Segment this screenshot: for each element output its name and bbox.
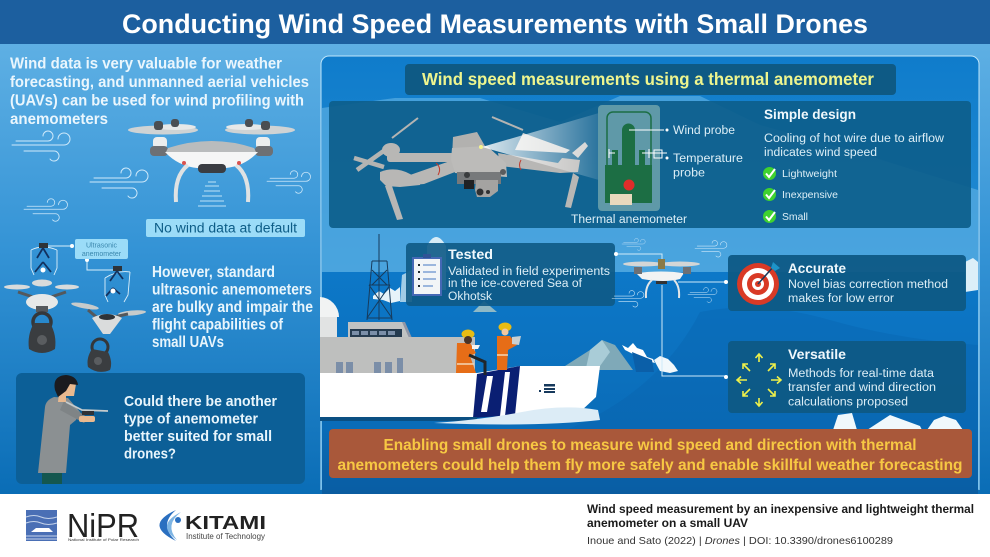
no wind data label: No wind data at default: [154, 220, 297, 236]
intro text: (UAVs) can be used for wind profiling with: [10, 92, 304, 110]
simple design text: Simple design: [764, 106, 856, 122]
conclusion banner: [329, 429, 972, 478]
panel: versatile: Methods for real-time data: [788, 368, 935, 380]
panel: question: Could there be another: [124, 393, 277, 410]
logo: Kitami: Institute of Technology: [186, 532, 265, 541]
anemometer labels: Wind probe: [673, 125, 735, 137]
panel: question: type of anemometer: [124, 410, 258, 428]
logo: NiPR: [26, 507, 139, 544]
simple design text: Small: [782, 212, 808, 223]
anemometer close-up: [598, 105, 668, 211]
logo: Kitami: KITAMI: [185, 512, 266, 533]
panel: accurate: Accurate: [788, 260, 846, 276]
simple design text: indicates wind speed: [764, 147, 877, 159]
panel: accurate: Novel bias correction method: [788, 279, 948, 291]
however text: flight capabilities of: [152, 316, 284, 334]
intro text: anemometers: [10, 111, 108, 128]
intro text: [10, 56, 309, 128]
citation: Wind speed measurement by an inexpensive and lightweight thermal: [587, 504, 974, 516]
tilted drone with ultrasonic anemometer and weight: [71, 266, 146, 372]
ultrasonic anemometer label: [44, 239, 128, 270]
panel: tested: Validated in field experiments: [448, 266, 610, 278]
icon: clipboard: [412, 254, 442, 296]
heading: thermal anemometer: [405, 64, 896, 95]
however text: [152, 264, 313, 351]
panel: accurate: makes for low error: [788, 293, 894, 305]
anemometer labels: Temperature: [673, 153, 743, 165]
anemometer labels: [571, 125, 743, 226]
intro text: forecasting, and unmanned aerial vehicles: [10, 74, 309, 91]
icon: arrows: [737, 354, 781, 406]
drone with ultrasonic anemometer and weight: [4, 243, 79, 353]
ultrasonic anemometer label: Ultrasonic: [86, 242, 118, 250]
heading: thermal anemometer: Wind speed measurements using a thermal anemometer: [422, 69, 874, 89]
however text: are bulky and impair the: [152, 299, 313, 316]
citation: [587, 504, 974, 547]
panel: accurate: [728, 255, 966, 311]
anemometer labels: probe: [673, 168, 705, 180]
white quadcopter: [128, 119, 295, 206]
however text: However, standard: [152, 264, 275, 281]
wind icons left: [12, 131, 310, 221]
simple design text: Cooling of hot wire due to airflow: [764, 133, 945, 145]
footer: [0, 494, 990, 557]
simple design text: Inexpensive: [782, 190, 838, 201]
gray drone: [354, 117, 588, 220]
simple design text: [763, 106, 945, 223]
researcher figure: [38, 375, 108, 484]
panel: drone and simple design: [329, 101, 971, 228]
panel: main scene: [321, 56, 979, 494]
logo: NiPR: National Institute of Polar Research: [68, 537, 139, 542]
logo: NiPR: NiPR: [67, 507, 139, 544]
small drone and connectors: [612, 238, 728, 379]
ship: [320, 234, 600, 424]
panel: tested: in the ice-covered Sea of: [448, 278, 583, 290]
citation: Inoue and Sato (2022) | Drones | DOI: 10.3390/drones6100289: [587, 535, 893, 547]
conclusion banner: Enabling small drones to measure wind speed and direction with thermal: [384, 437, 916, 454]
citation: anemometer on a small UAV: [587, 518, 748, 530]
title bar: Conducting Wind Speed Measurements with Small Drones: [122, 9, 868, 39]
intro text: Wind data is very valuable for weather: [10, 56, 282, 72]
panel: tested: Tested: [448, 246, 493, 262]
ultrasonic anemometer label: anemometer: [82, 251, 122, 258]
iceberg scenery: [373, 237, 978, 430]
panel: question: [16, 373, 305, 484]
light beam: [482, 113, 599, 180]
simple design text: Lightweight: [782, 169, 837, 180]
anemometer labels: Thermal anemometer: [571, 214, 687, 226]
panel: question: drones?: [124, 446, 176, 462]
panel: tested: [406, 243, 615, 306]
title bar: [0, 0, 990, 44]
panel: versatile: Versatile: [788, 346, 846, 362]
however text: ultrasonic anemometers: [152, 282, 312, 298]
workers: [456, 322, 521, 375]
icon: target: [737, 262, 780, 305]
logo: Kitami: [160, 510, 266, 541]
conclusion banner: anemometers could help them fly more safely and enable skillful weather forecasting: [338, 457, 962, 474]
panel: tested: Okhotsk: [448, 291, 492, 303]
however text: small UAVs: [152, 334, 224, 351]
panel: versatile: transfer and wind direction: [788, 382, 936, 394]
panel: question: better suited for small: [124, 428, 272, 445]
panel: versatile: calculations proposed: [788, 396, 908, 408]
panel: versatile: [728, 341, 966, 413]
